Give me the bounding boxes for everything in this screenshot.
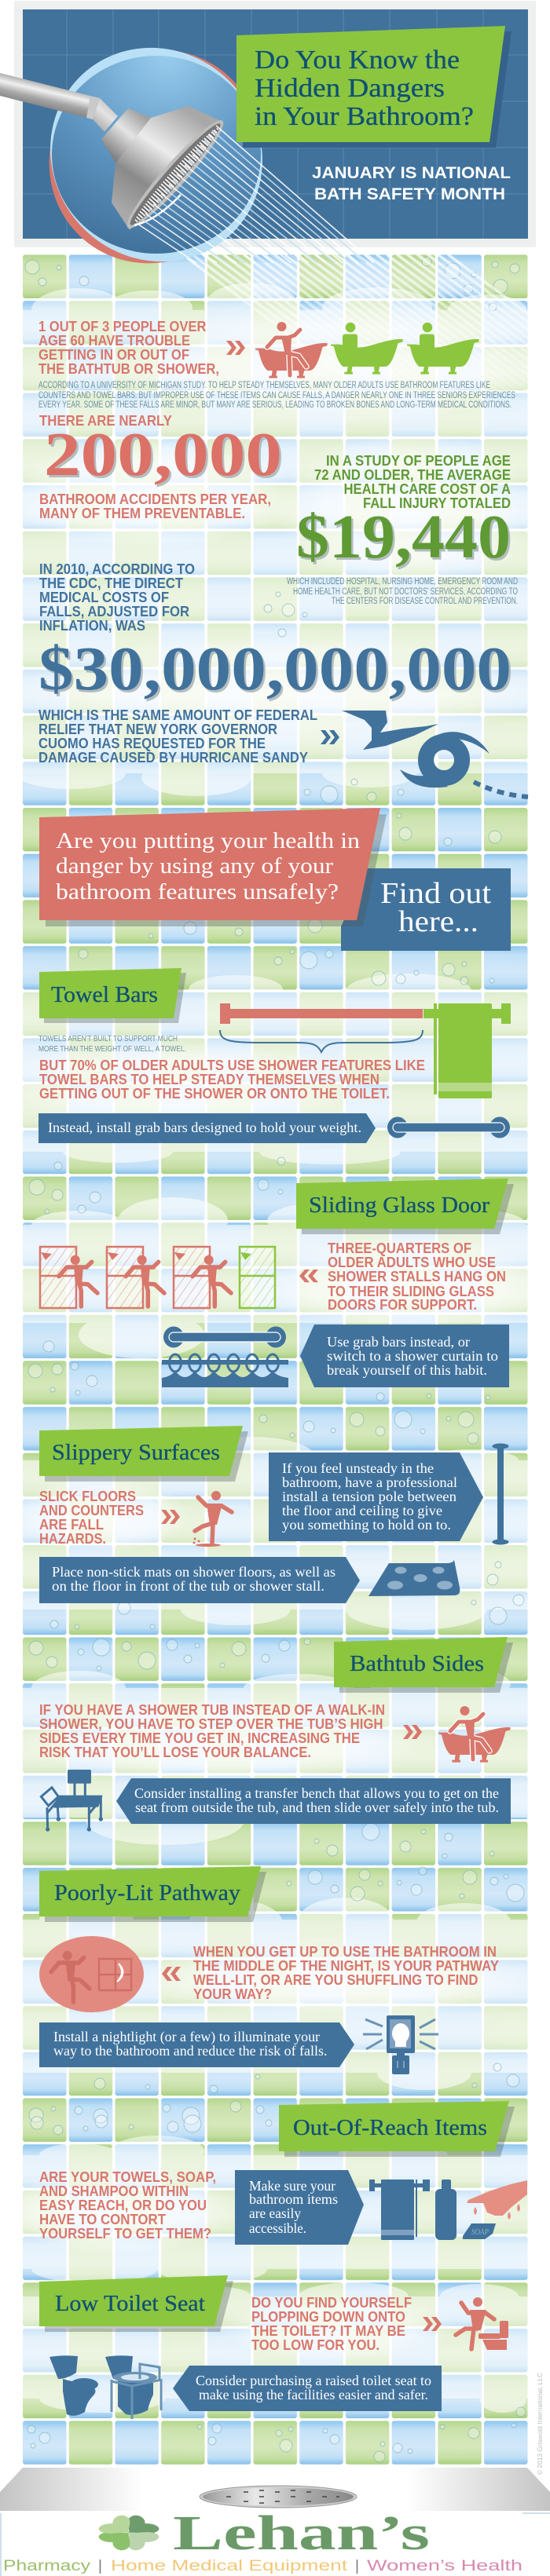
- icon: towel bar: [220, 1003, 511, 1098]
- callout: tension pole: If you feel unsteady in the: [282, 1460, 434, 1476]
- text: within reach: [39, 2169, 216, 2242]
- statistic: $19,440: 72 AND OLDER, THE AVERAGE: [314, 467, 511, 483]
- text: night pathway: [193, 1944, 499, 2002]
- chevrons: [423, 2317, 442, 2331]
- callout: find out here: [39, 808, 511, 951]
- callout: accessible items: bathroom items: [249, 2191, 338, 2207]
- text: within reach: AND SHAMPOO WITHIN: [39, 2183, 189, 2199]
- chevrons: [161, 1510, 180, 1524]
- icon: grab bar: [387, 1116, 510, 1138]
- callout: tension pole: [269, 1452, 483, 1541]
- callout: raised toilet seat: [173, 2366, 442, 2411]
- statistic: 200,000: 200,000: [44, 421, 282, 489]
- text: low toilet: TOO LOW FOR YOU.: [251, 2337, 380, 2353]
- text: towel bar statistic: [39, 1058, 425, 1102]
- callout: raised toilet seat: Consider purchasing a raised toilet seat to: [196, 2373, 431, 2388]
- tagline: |: [355, 2558, 359, 2574]
- text: sliding door statistic: THREE-QUARTERS OF: [328, 1240, 471, 1256]
- heading: towel bars: Towel Bars: [51, 983, 158, 1007]
- text: within reach: EASY REACH, OR DO YOU: [39, 2198, 207, 2213]
- chevrons: [299, 1270, 318, 1282]
- logo: Lehan's: [1, 2507, 550, 2576]
- statistic: one in three: 1 OUT OF 3 PEOPLE OVER: [38, 319, 206, 334]
- icon: tension pole: [492, 1443, 509, 1545]
- text: within reach: ARE YOUR TOWELS, SOAP,: [39, 2169, 216, 2185]
- subtitle: [312, 164, 511, 203]
- text: slick floors: SLICK FLOORS: [39, 1489, 136, 1504]
- callout: tension pole: bathroom, have a professional: [282, 1474, 457, 1490]
- tagline: |: [98, 2558, 102, 2574]
- text: towel note: TOWELS AREN’T BUILT TO SUPPORT MUCH: [38, 1034, 178, 1043]
- statistic: one in three: AGE 60 HAVE TROUBLE: [38, 333, 190, 349]
- statistic: $19,440: $19,440: [296, 503, 511, 572]
- statistic: 200,000: [39, 413, 282, 521]
- icon: New York map and hurricane: [342, 711, 528, 797]
- text: sliding door statistic: SHOWER STALLS HANG ON: [328, 1269, 506, 1284]
- statistic: $30,000,000,000: DAMAGE CAUSED BY HURRICANE SANDY: [38, 750, 308, 765]
- statistic: $30,000,000,000: RELIEF THAT NEW YORK GOVERNOR: [38, 722, 277, 737]
- tagline: Women’s Health: [367, 2558, 522, 2574]
- icon: doors and falling figures: [40, 1247, 275, 1308]
- logo: Lehan's: Lehan’s: [173, 2507, 430, 2560]
- text: low toilet: DO YOU FIND YOURSELF: [251, 2295, 412, 2311]
- statistic: one in three: GETTING IN OR OUT OF: [38, 347, 189, 363]
- callout: accessible items: accessible.: [249, 2220, 306, 2236]
- subtitle: JANUARY IS NATIONAL: [312, 164, 511, 182]
- text: low toilet: [251, 2295, 412, 2353]
- icon: towel, bottle, soap and hand: SOAP: [471, 2228, 489, 2237]
- statistic: $30,000,000,000: IN 2010, ACCORDING TO: [39, 561, 195, 577]
- heading: bathtub sides: Bathtub Sides: [350, 1652, 484, 1676]
- callout: accessible items: are easily: [249, 2205, 301, 2221]
- text: tub sides: SIDES EVERY TIME YOU GET IN, INCREASING THE: [39, 1730, 360, 1746]
- callout: find out here: here...: [398, 905, 478, 938]
- heading: poorly-lit pathway: Poorly-Lit Pathway: [54, 1881, 240, 1906]
- callout: non-stick mats: [39, 1557, 360, 1603]
- text: tub sides: IF YOU HAVE A SHOWER TUB INSTEAD OF A WALK-IN: [39, 1702, 385, 1718]
- statistic: $30,000,000,000: [38, 561, 512, 765]
- statistic: one in three: [38, 319, 219, 377]
- statistic: $30,000,000,000: THE CDC, THE DIRECT: [39, 575, 183, 591]
- title: Hidden Dangers: [255, 74, 445, 103]
- callout: nightlight: Install a nightlight (or a few) to illuminate your: [53, 2029, 320, 2045]
- callout: nightlight: way to the bathroom and reduce the risk of falls.: [53, 2043, 327, 2059]
- icon: shower curtain: [162, 1354, 288, 1387]
- water droplets: [25, 257, 526, 2462]
- chevrons: [226, 341, 245, 355]
- callout: grab bars: Instead, install grab bars designed to hold your weight.: [48, 1120, 361, 1135]
- text: slick floors: AND COUNTERS: [39, 1503, 144, 1518]
- text: slick floors: [39, 1489, 144, 1547]
- callout: grab bars: [38, 1113, 376, 1143]
- tagline: Home Medical Equipment: [111, 2558, 348, 2574]
- tagline: Pharmacy: [3, 2558, 91, 2574]
- foam glow behind text: [0, 306, 550, 2361]
- text: low toilet: THE TOILET? IT MAY BE: [251, 2323, 405, 2339]
- chevrons: [321, 730, 339, 744]
- icon: nightlight: [363, 2015, 438, 2074]
- callout: tension pole: the floor and ceiling to give: [282, 1503, 442, 1518]
- callout: tension pole: you something to hold on to.: [282, 1517, 451, 1533]
- callout: find out here: Are you putting your health in: [56, 828, 361, 853]
- heading: out-of-reach items: Out-Of-Reach Items: [293, 2116, 487, 2140]
- statistic: 200,000: THERE ARE NEARLY: [39, 413, 172, 429]
- callout: find out here: danger by using any of your: [56, 853, 333, 879]
- heading: out-of-reach items: [279, 2101, 515, 2157]
- callout: non-stick mats: on the floor in front of the tub or shower stall.: [52, 1578, 324, 1594]
- text: tub sides: SHOWER, YOU HAVE TO STEP OVER THE TUB’S HIGH: [39, 1716, 383, 1732]
- icon: clover: [96, 2514, 162, 2552]
- statistic: $30,000,000,000: MEDICAL COSTS OF: [39, 590, 169, 605]
- text: night pathway: THE MIDDLE OF THE NIGHT, IS YOUR PATHWAY: [193, 1958, 499, 1974]
- icon: towel, bottle, soap and hand: [369, 2180, 527, 2240]
- title: Do You Know the: [255, 46, 460, 75]
- statistic: $19,440: FALL INJURY TOTALED: [363, 495, 511, 511]
- text: sliding door statistic: OLDER ADULTS WHO USE: [328, 1255, 496, 1270]
- text: within reach: HAVE TO CONTORT: [39, 2212, 166, 2227]
- text: tub sides: RISK THAT YOU’LL LOSE YOUR BALANCE.: [39, 1745, 311, 1760]
- text: slick floors: ARE FALL: [39, 1517, 104, 1533]
- icon: figure falling onto toilet: [456, 2297, 508, 2350]
- heading: sliding glass door: Sliding Glass Door: [309, 1193, 490, 1218]
- statistic: one in three: THE BATHTUB OR SHOWER,: [38, 361, 219, 377]
- panel: header: [0, 1, 536, 306]
- callout: tension pole: install a tension pole between: [282, 1489, 456, 1504]
- tagline: [3, 2558, 522, 2574]
- shower water stripes over tiles: [182, 254, 531, 424]
- text: night pathway: WHEN YOU GET UP TO USE THE BATHROOM IN: [193, 1944, 497, 1960]
- callout: curtain advice: switch to a shower curtain to: [327, 1348, 498, 1364]
- callout: curtain advice: [300, 1325, 509, 1387]
- icon: grab bar: [163, 1327, 286, 1347]
- text: towel note: MORE THAN THE WEIGHT OF WELL, A TOWEL.: [38, 1044, 186, 1054]
- heading: towel bars: [39, 968, 186, 1023]
- shower head: [0, 73, 232, 236]
- callout: transfer bench: [116, 1778, 511, 1824]
- text: slick floors: HAZARDS.: [39, 1531, 106, 1547]
- statistic: 200,000: BATHROOM ACCIDENTS PER YEAR,: [39, 491, 271, 507]
- subtitle: BATH SAFETY MONTH: [314, 185, 505, 203]
- callout: find out here: Find out: [380, 877, 491, 910]
- heading: low toilet seat: Low Toilet Seat: [55, 2292, 205, 2316]
- icon: transfer bench: [41, 1770, 103, 1832]
- callout: accessible items: [235, 2170, 364, 2245]
- text: within reach: YOURSELF TO GET THEM?: [39, 2226, 211, 2242]
- callout: nightlight: [39, 2022, 354, 2067]
- statistic: $30,000,000,000: INFLATION, WAS: [39, 618, 145, 634]
- icon: person climbing into tub: [438, 1706, 511, 1763]
- text: sliding door statistic: [328, 1240, 506, 1313]
- text: towel note: [38, 1034, 186, 1054]
- text: low toilet: PLOPPING DOWN ONTO: [251, 2309, 405, 2325]
- icon: bath mat: [368, 1560, 460, 1596]
- text: sliding door statistic: TO THEIR SLIDING GLASS: [328, 1284, 494, 1299]
- chevrons: [403, 1725, 422, 1739]
- statistic: $30,000,000,000: WHICH IS THE SAME AMOUNT OF FEDERAL: [38, 707, 317, 723]
- chevrons: [162, 1967, 181, 1981]
- text: towel bar statistic: GETTING OUT OF THE SHOWER OR ONTO THE TOILET.: [39, 1086, 390, 1102]
- icon: three tubs: [255, 322, 479, 378]
- statistic: $30,000,000,000: CUOMO HAS REQUESTED FOR THE: [38, 736, 266, 751]
- callout: non-stick mats: Place non-stick mats on shower floors, as well as: [52, 1564, 336, 1580]
- callout: transfer bench: seat from outside the tub, and then slide over safely into the tub.: [135, 1800, 499, 1815]
- callout: curtain advice: break yourself of this habit.: [327, 1362, 487, 1378]
- heading: slippery surfaces: [39, 1426, 248, 1482]
- statistic: $19,440: [287, 453, 518, 606]
- heading: slippery surfaces: Slippery Surfaces: [52, 1441, 220, 1465]
- heading: low toilet seat: [39, 2275, 233, 2332]
- text: towel bar statistic: BUT 70% OF OLDER ADULTS USE SHOWER FEATURES LIKE: [39, 1058, 425, 1073]
- water spray: [138, 126, 374, 263]
- foam overlays: [16, 283, 529, 2413]
- statistic: $30,000,000,000: FALLS, ADJUSTED FOR: [39, 604, 189, 619]
- text: tub sides: [39, 1702, 385, 1760]
- shower floor and drain: [0, 2468, 550, 2511]
- callout: raised toilet seat: make using the facilities easier and safer.: [199, 2387, 428, 2402]
- statistic: $19,440: HEALTH CARE COST OF A: [344, 481, 511, 497]
- text: towel bar statistic: TOWEL BARS TO HELP STEADY THEMSELVES WHEN: [39, 1072, 380, 1087]
- shower disc: [6, 5, 306, 306]
- text: study note: [38, 381, 515, 410]
- statistic: $19,440: IN A STUDY OF PEOPLE AGE: [326, 453, 511, 469]
- icon: falling figure at night window: [39, 1936, 144, 2012]
- title banner: [236, 26, 512, 148]
- copyright: © 2013 Griswold International, LLC: [537, 2373, 544, 2475]
- callout: curtain advice: Use grab bars instead, or: [327, 1334, 470, 1350]
- heading: sliding glass door: [296, 1178, 514, 1234]
- text: night pathway: WELL-LIT, OR ARE YOU SHUFFLING TO FIND: [193, 1972, 478, 1988]
- callout: find out here: bathroom features unsafely?: [56, 879, 339, 904]
- statistic: $30,000,000,000: $30,000,000,000: [38, 635, 512, 703]
- title: in Your Bathroom?: [255, 102, 474, 131]
- icon: toilets: [50, 2355, 161, 2419]
- text: night pathway: YOUR WAY?: [193, 1986, 272, 2002]
- callout: accessible items: Make sure your: [249, 2178, 336, 2194]
- icon: slipping figure: [193, 1491, 232, 1547]
- callout: transfer bench: Consider installing a transfer bench that allows you to get on the: [134, 1785, 499, 1801]
- heading: bathtub sides: [334, 1637, 513, 1693]
- heading: poorly-lit pathway: [39, 1866, 266, 1922]
- title: [255, 46, 474, 131]
- text: sliding door statistic: DOORS FOR SUPPORT.: [328, 1297, 477, 1313]
- statistic: 200,000: MANY OF THEM PREVENTABLE.: [39, 506, 245, 521]
